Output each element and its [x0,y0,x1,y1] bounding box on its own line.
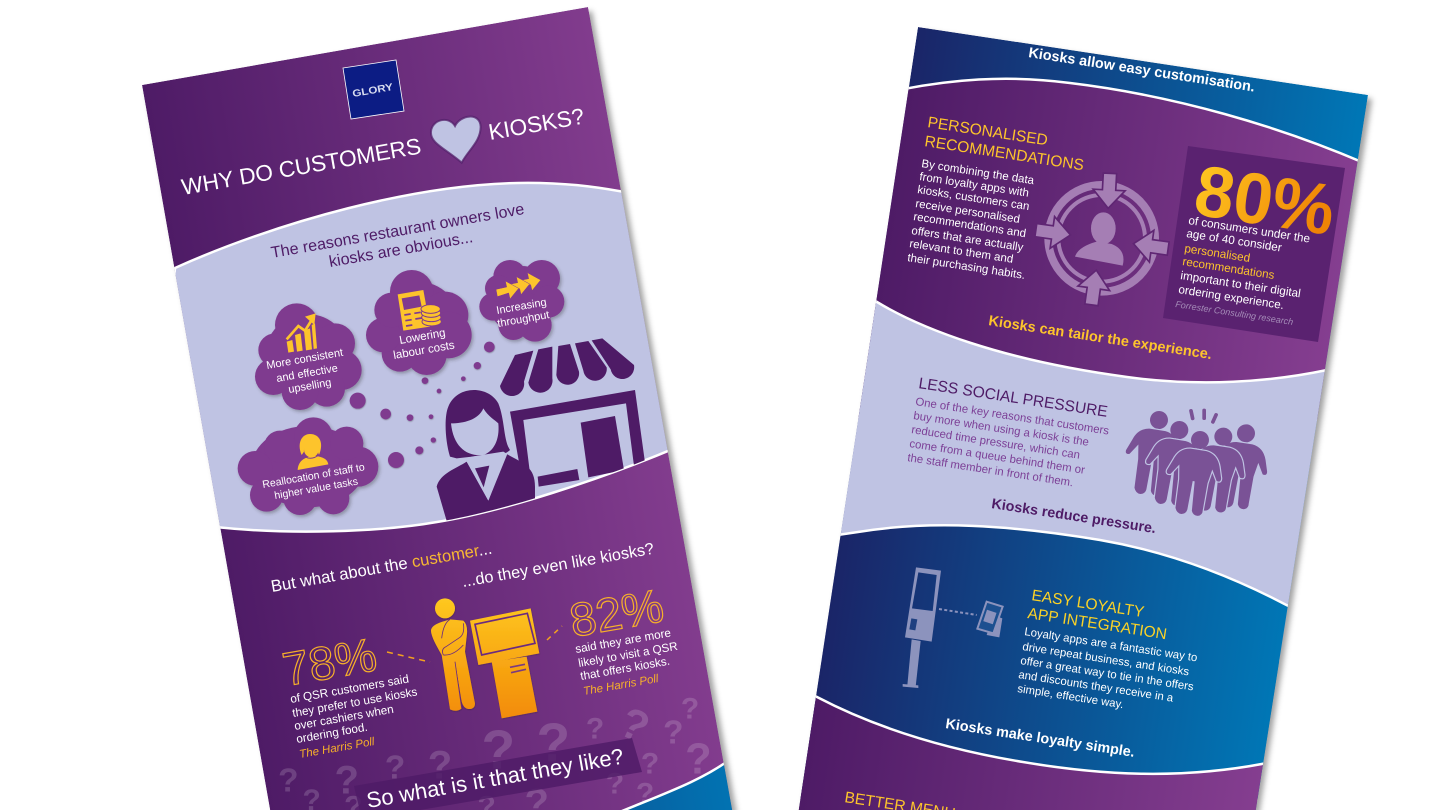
icon: calculator and coins [398,290,441,331]
panel: 80 percent stat box [1163,146,1345,342]
question marks background: ? [685,735,712,783]
text: social pressure body [907,396,1110,489]
text: personalised body: from loyalty apps with [919,171,1030,200]
icon: awning [500,338,634,396]
text: social pressure body: buy more when using a kiosk is the [913,410,1090,449]
thought bubbles dots [350,342,495,468]
tagline: customisation: Kiosks allow easy customisation. [1027,45,1256,96]
question marks background: ? [278,763,299,800]
cloud labels: labour costs [392,339,456,362]
cloud labels: More consistent [265,347,344,372]
panel: 80 percent stat box: recommendations [1182,255,1275,282]
lavender social pressure section [822,300,1325,662]
icon: counter bar [538,469,579,487]
icon: thinking person and kiosk [431,598,539,718]
text: social pressure body: One of the key reasons that customers [915,396,1110,438]
heading: what about the customer: But what about the customer... [269,539,494,596]
question marks background: ? [385,749,405,786]
blue corner of next section [621,762,732,810]
question marks background: ? [663,714,684,751]
stat: 82 percent: said they are more [574,627,672,656]
kiosk [470,608,539,718]
tagline: reduce pressure: Kiosks reduce pressure. [990,496,1157,537]
thinking person [431,598,475,711]
cloud: throughput [479,260,564,342]
question marks background: ? [612,698,656,753]
cloud labels: Reallocation of staff to [261,461,366,491]
text: personalised body: By combining the data [921,158,1035,187]
text: loyalty body: and discounts they receive in a [1018,669,1175,705]
tagline: loyalty simple: Kiosks make loyalty simple. [944,716,1136,761]
icon: arrows [496,273,541,299]
stat: 82 percent [570,590,678,695]
text: reasons intro: kiosks are obvious... [328,228,474,271]
blue loyalty section [800,524,1288,802]
tagline: tailor the experience: Kiosks can tailor the experience. [987,313,1213,363]
dashed connector: 78 percent [387,652,430,662]
text: personalised body: kiosks, customers can [917,184,1030,213]
question marks background: ? [334,758,359,802]
text: personalised body: offers that are actually [911,225,1024,254]
icon: target with arrows and person [1034,173,1170,307]
cloud: labour costs [366,270,472,375]
stat: 78 percent: 78% [279,627,380,696]
heading: personalised recommendations [923,114,1085,174]
cloud labels: and effective [275,362,339,385]
panel: left infographic sheet [142,7,745,810]
text: personalised body: receive personalised [915,198,1021,226]
text: loyalty body: drive repeat business, and kiosks [1022,641,1190,678]
question marks background: ? [586,712,604,745]
text: loyalty body: simple, effective way. [1017,683,1124,711]
question marks background: ? [681,692,699,725]
page shadow: right sheet [802,31,1372,810]
text: social pressure body: reduced time pressure, which can [911,424,1081,462]
purple better menu section [798,695,1264,810]
text: personalised body [907,158,1035,282]
panel: 80 percent stat box: Forrester Consulting research [1175,299,1294,327]
cloud labels: higher value tasks [273,476,359,502]
heading: easy loyalty app integration: EASY LOYALTY [1030,587,1146,621]
icon: staff member [298,434,328,470]
heading: personalised recommendations: PERSONALISED [926,114,1049,149]
panel: right infographic sheet [798,27,1368,810]
panel: 80 percent stat box: of consumers under the [1188,214,1311,246]
icon: kiosk and phone with QR code [903,567,1003,688]
question marks background: ? [606,767,624,800]
logo: Glory: GLORY [352,82,394,100]
cloud labels: Increasing [495,296,548,317]
stat: 78 percent: over cashiers when [293,703,395,733]
cloud labels: Lowering [398,327,446,347]
cloud labels [261,296,550,502]
title: KIOSKS? [487,104,586,145]
title: WHY DO CUSTOMERS [180,134,423,200]
heading: easy loyalty app integration: APP INTEGRATION [1026,605,1168,643]
heading: less social pressure: LESS SOCIAL PRESSURE [917,375,1109,421]
logo: Glory [343,60,404,119]
heading: personalised recommendations: RECOMMENDATIONS [923,133,1085,174]
question marks background: ? [482,718,515,780]
question marks background: ? [636,777,654,810]
heading: easy loyalty app integration [1026,587,1168,643]
stat: 78 percent: ordering food. [295,721,369,746]
icon: server woman [437,390,535,527]
panel: 80 percent stat box: personalised [1184,242,1251,265]
blue top section [798,27,1368,810]
cloud labels: upselling [287,377,332,396]
stat: 78 percent [282,638,418,758]
question marks background: ? [641,747,659,780]
question marks background [278,692,712,810]
icon: growth chart [287,313,317,353]
illustration: shop and server [437,338,648,527]
stat: 78 percent: they prefer to use kiosks [291,685,418,720]
heading: what about the customer: ...do they even like kiosks? [461,540,655,591]
text: loyalty body [1017,626,1198,711]
text: social pressure body: the staff member in front of them. [907,452,1074,489]
panel: lavender reasons band [150,183,680,532]
text: reasons intro: The reasons restaurant owners love [270,200,526,262]
page shadow: left sheet [146,11,737,810]
icon: crowd of people [1120,407,1274,519]
text: loyalty body: offer a great way to tie in the offers [1020,655,1195,693]
text: personalised body: relevant to them and [909,238,1014,266]
panel: 80 percent stat box: age of 40 consider [1186,227,1283,255]
icon: heart [431,117,481,163]
panel: 80 percent stat box: ordering experience. [1178,283,1285,312]
stat: 82 percent: 82% [566,578,667,647]
heading: what about the customer [271,543,653,592]
left sheet purple background [142,7,733,810]
icon: shop frame [510,390,645,469]
text: personalised body: recommendations and [913,211,1027,240]
question marks background: ? [428,743,452,787]
stat: 78 percent: The Harris Poll [298,736,376,761]
panel: 80 percent stat box: 80% [1190,151,1340,251]
panel: 80 percent stat box: important to their digital [1180,269,1302,300]
icon: shop door [581,416,624,477]
stat: 82 percent: The Harris Poll [582,673,660,698]
text: personalised body: their purchasing habits. [907,252,1026,282]
text: social pressure body: come from a queue behind them or [909,438,1086,477]
stat: 78 percent: of QSR customers said [289,672,410,706]
stat: 82 percent: that offers kiosks. [579,655,671,683]
text: loyalty body: Loyalty apps are a fantastic way to [1024,626,1198,664]
cloud: upselling [255,303,362,410]
stat: 82 percent: likely to visit a QSR [577,640,679,670]
purple personalised section [858,78,1358,422]
dashed connector: 82 percent [547,626,562,640]
cloud labels: throughput [496,309,550,330]
question marks background: ? [537,712,570,774]
title [180,108,583,194]
cloud: staff reallocation [238,417,378,515]
